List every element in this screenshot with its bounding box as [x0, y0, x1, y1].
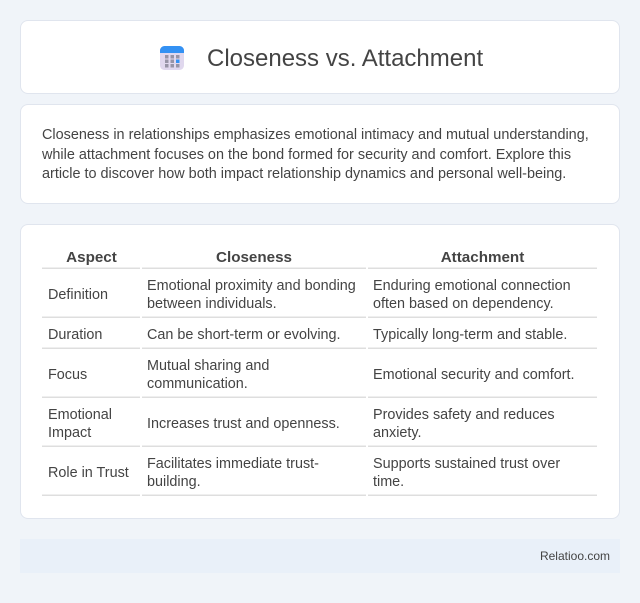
intro text: [42, 127, 589, 182]
intro text: article to discover how both impact relationship dynamics and personal well-being.: [42, 166, 566, 182]
intro text: Closeness in relationships emphasizes emotional intimacy and mutual understanding,: [42, 127, 589, 143]
row: definition: Enduring emotional connection: [373, 278, 571, 294]
row: emotional impact: anxiety.: [373, 425, 422, 441]
row: role in trust: Facilitates immediate trust-: [147, 456, 319, 472]
panel: comparison table: [20, 224, 620, 519]
row: definition: [42, 278, 597, 318]
row: role in trust: [42, 456, 597, 496]
row: emotional impact: [42, 407, 597, 447]
row: focus: [42, 358, 597, 398]
header row: Closeness: [216, 249, 292, 266]
intro text: while attachment focuses on the bond formed for security and comfort. Explore this: [42, 147, 571, 163]
row: definition: between individuals.: [147, 296, 277, 312]
row: role in trust: Role in Trust: [48, 465, 129, 481]
panel: title card: [20, 20, 620, 94]
footer bar: [20, 539, 620, 573]
row: duration: Typically long-term and stable.: [373, 327, 567, 343]
row: focus: Emotional security and comfort.: [373, 367, 575, 383]
row: role in trust: Supports sustained trust over: [373, 456, 560, 472]
title: Closeness vs. Attachment: [207, 45, 483, 72]
header row: Aspect: [66, 249, 117, 266]
header row: Attachment: [441, 249, 524, 266]
icon: calendar: [160, 46, 184, 70]
row: duration: Duration: [48, 327, 102, 343]
row: emotional impact: Impact: [48, 425, 91, 441]
row: role in trust: time.: [373, 474, 404, 490]
row: definition: Definition: [48, 287, 108, 303]
row: role in trust: building.: [147, 474, 201, 490]
row: emotional impact: Increases trust and openness.: [147, 416, 340, 432]
comparison table: [42, 249, 597, 496]
row: emotional impact: Provides safety and reduces: [373, 407, 555, 423]
row: focus: Focus: [48, 367, 87, 383]
row: focus: Mutual sharing and: [147, 358, 269, 374]
row: definition: often based on dependency.: [373, 296, 554, 312]
panel: introduction: [20, 104, 620, 204]
row: duration: [42, 327, 597, 349]
row: duration: Can be short-term or evolving.: [147, 327, 341, 343]
footer attribution: Relatioo.com: [540, 549, 610, 563]
row: emotional impact: Emotional: [48, 407, 112, 423]
row: focus: communication.: [147, 376, 248, 392]
header row: [42, 249, 597, 269]
row: definition: Emotional proximity and bonding: [147, 278, 356, 294]
